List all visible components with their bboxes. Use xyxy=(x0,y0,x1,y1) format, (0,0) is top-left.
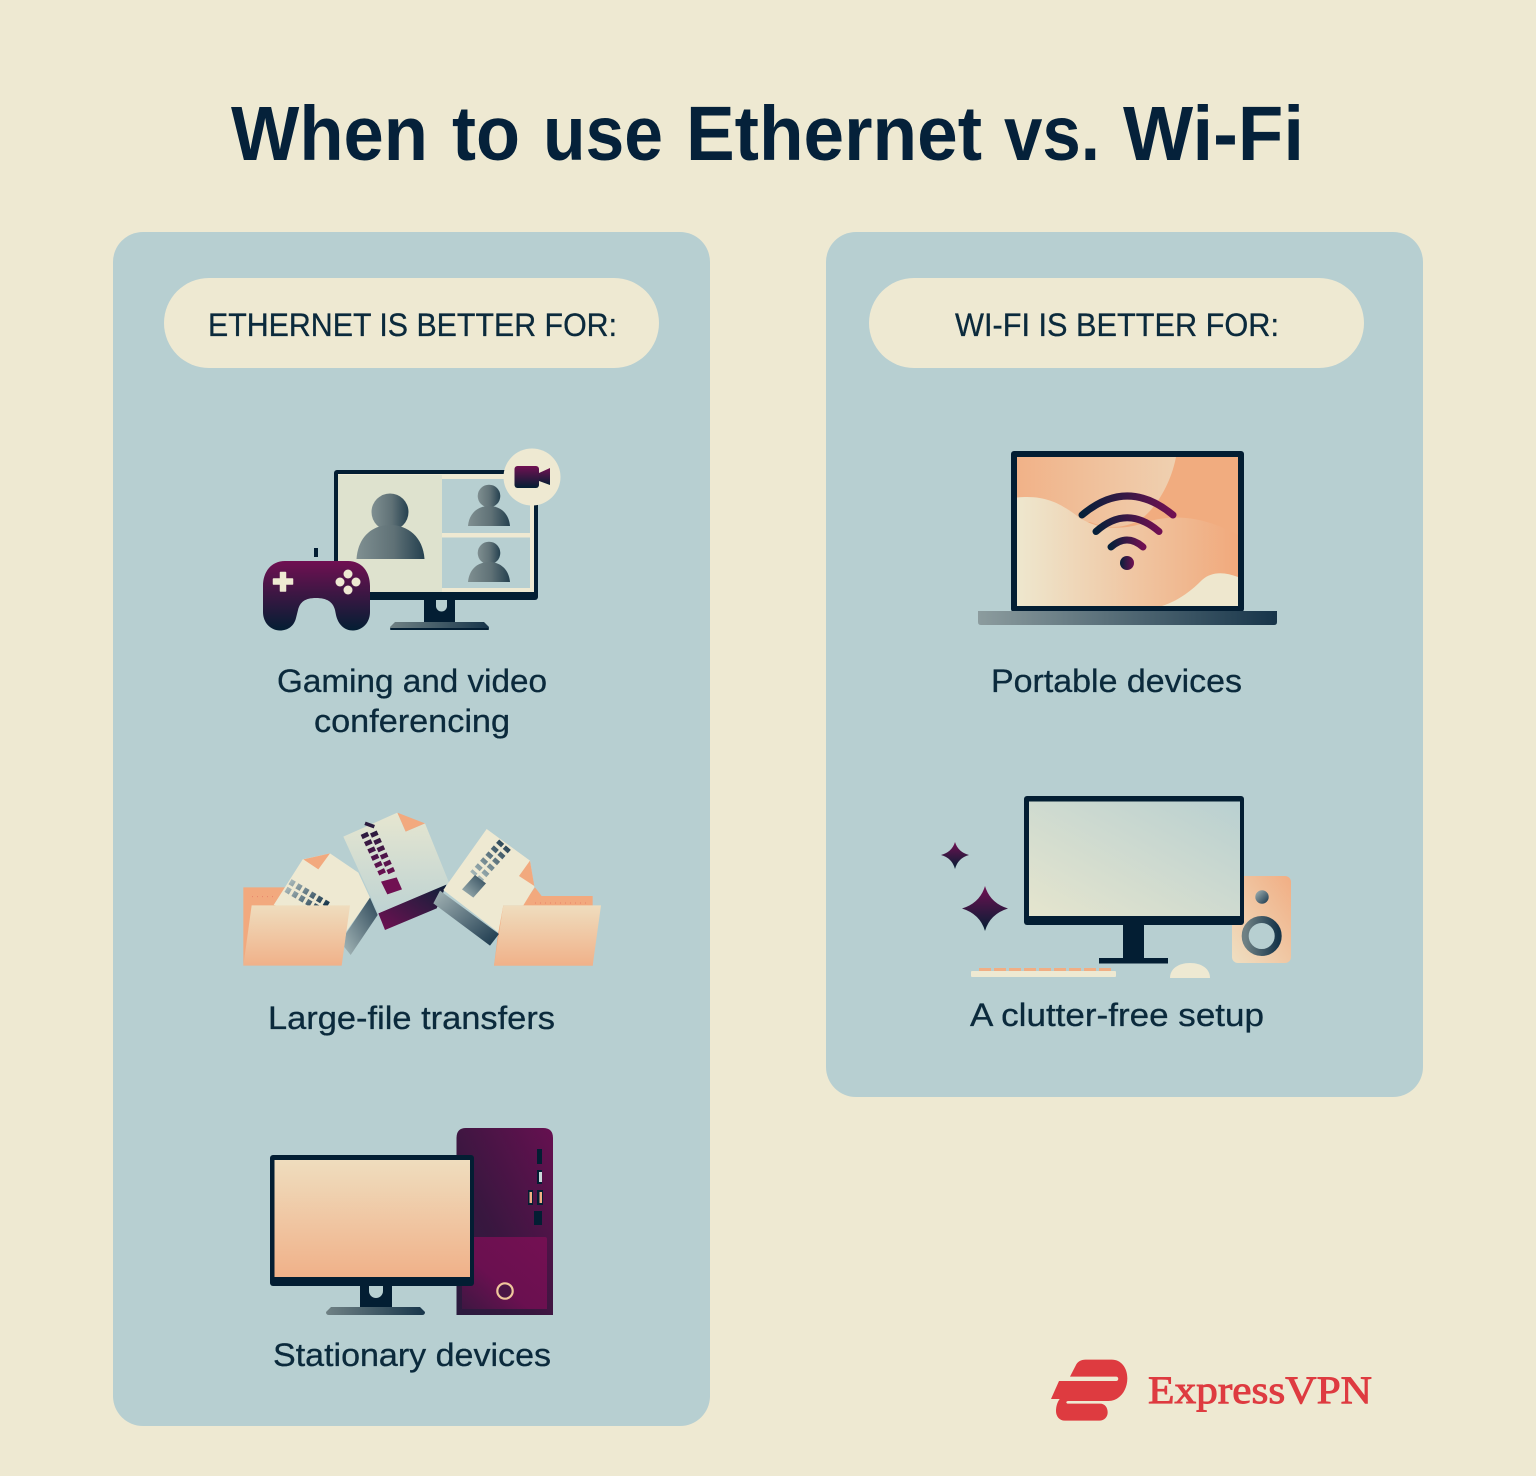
label: large-file transfers: Large-file transfers xyxy=(268,1000,555,1036)
icon: laptop with wi-fi xyxy=(978,451,1277,625)
heading pill: ethernet: ETHERNET IS BETTER FOR: xyxy=(208,307,617,343)
logo wordmark: ExpressVPN xyxy=(1148,1369,1372,1412)
label: gaming and video conferencing xyxy=(277,663,547,739)
title: vs. xyxy=(1004,91,1100,177)
title: to xyxy=(452,91,520,177)
icon: stationary devices xyxy=(270,1128,553,1315)
heading pill: ethernet xyxy=(164,278,659,368)
panel: ethernet xyxy=(113,232,710,1426)
title: use xyxy=(543,91,663,177)
label: gaming and video conferencing: conferencing xyxy=(314,703,510,739)
logo: ExpressVPN xyxy=(1051,1360,1372,1421)
title: Wi-Fi xyxy=(1123,91,1304,177)
label: gaming and video conferencing: Gaming and video xyxy=(277,663,547,699)
label: stationary devices: Stationary devices xyxy=(273,1337,551,1373)
title: When xyxy=(231,91,428,177)
icon: gaming and video conferencing xyxy=(263,448,560,630)
panel: wi-fi xyxy=(826,232,1423,1097)
title: Ethernet xyxy=(686,91,982,177)
label: portable devices: Portable devices xyxy=(991,663,1242,699)
label: clutter-free setup: A clutter-free setup xyxy=(970,997,1264,1033)
logo mark xyxy=(1051,1360,1127,1421)
icon: clutter-free setup xyxy=(941,796,1291,978)
title xyxy=(231,91,1304,177)
heading pill: wi-fi: WI-FI IS BETTER FOR: xyxy=(955,307,1279,343)
heading pill: wi-fi xyxy=(869,278,1364,368)
icon: large-file transfers xyxy=(243,813,601,966)
